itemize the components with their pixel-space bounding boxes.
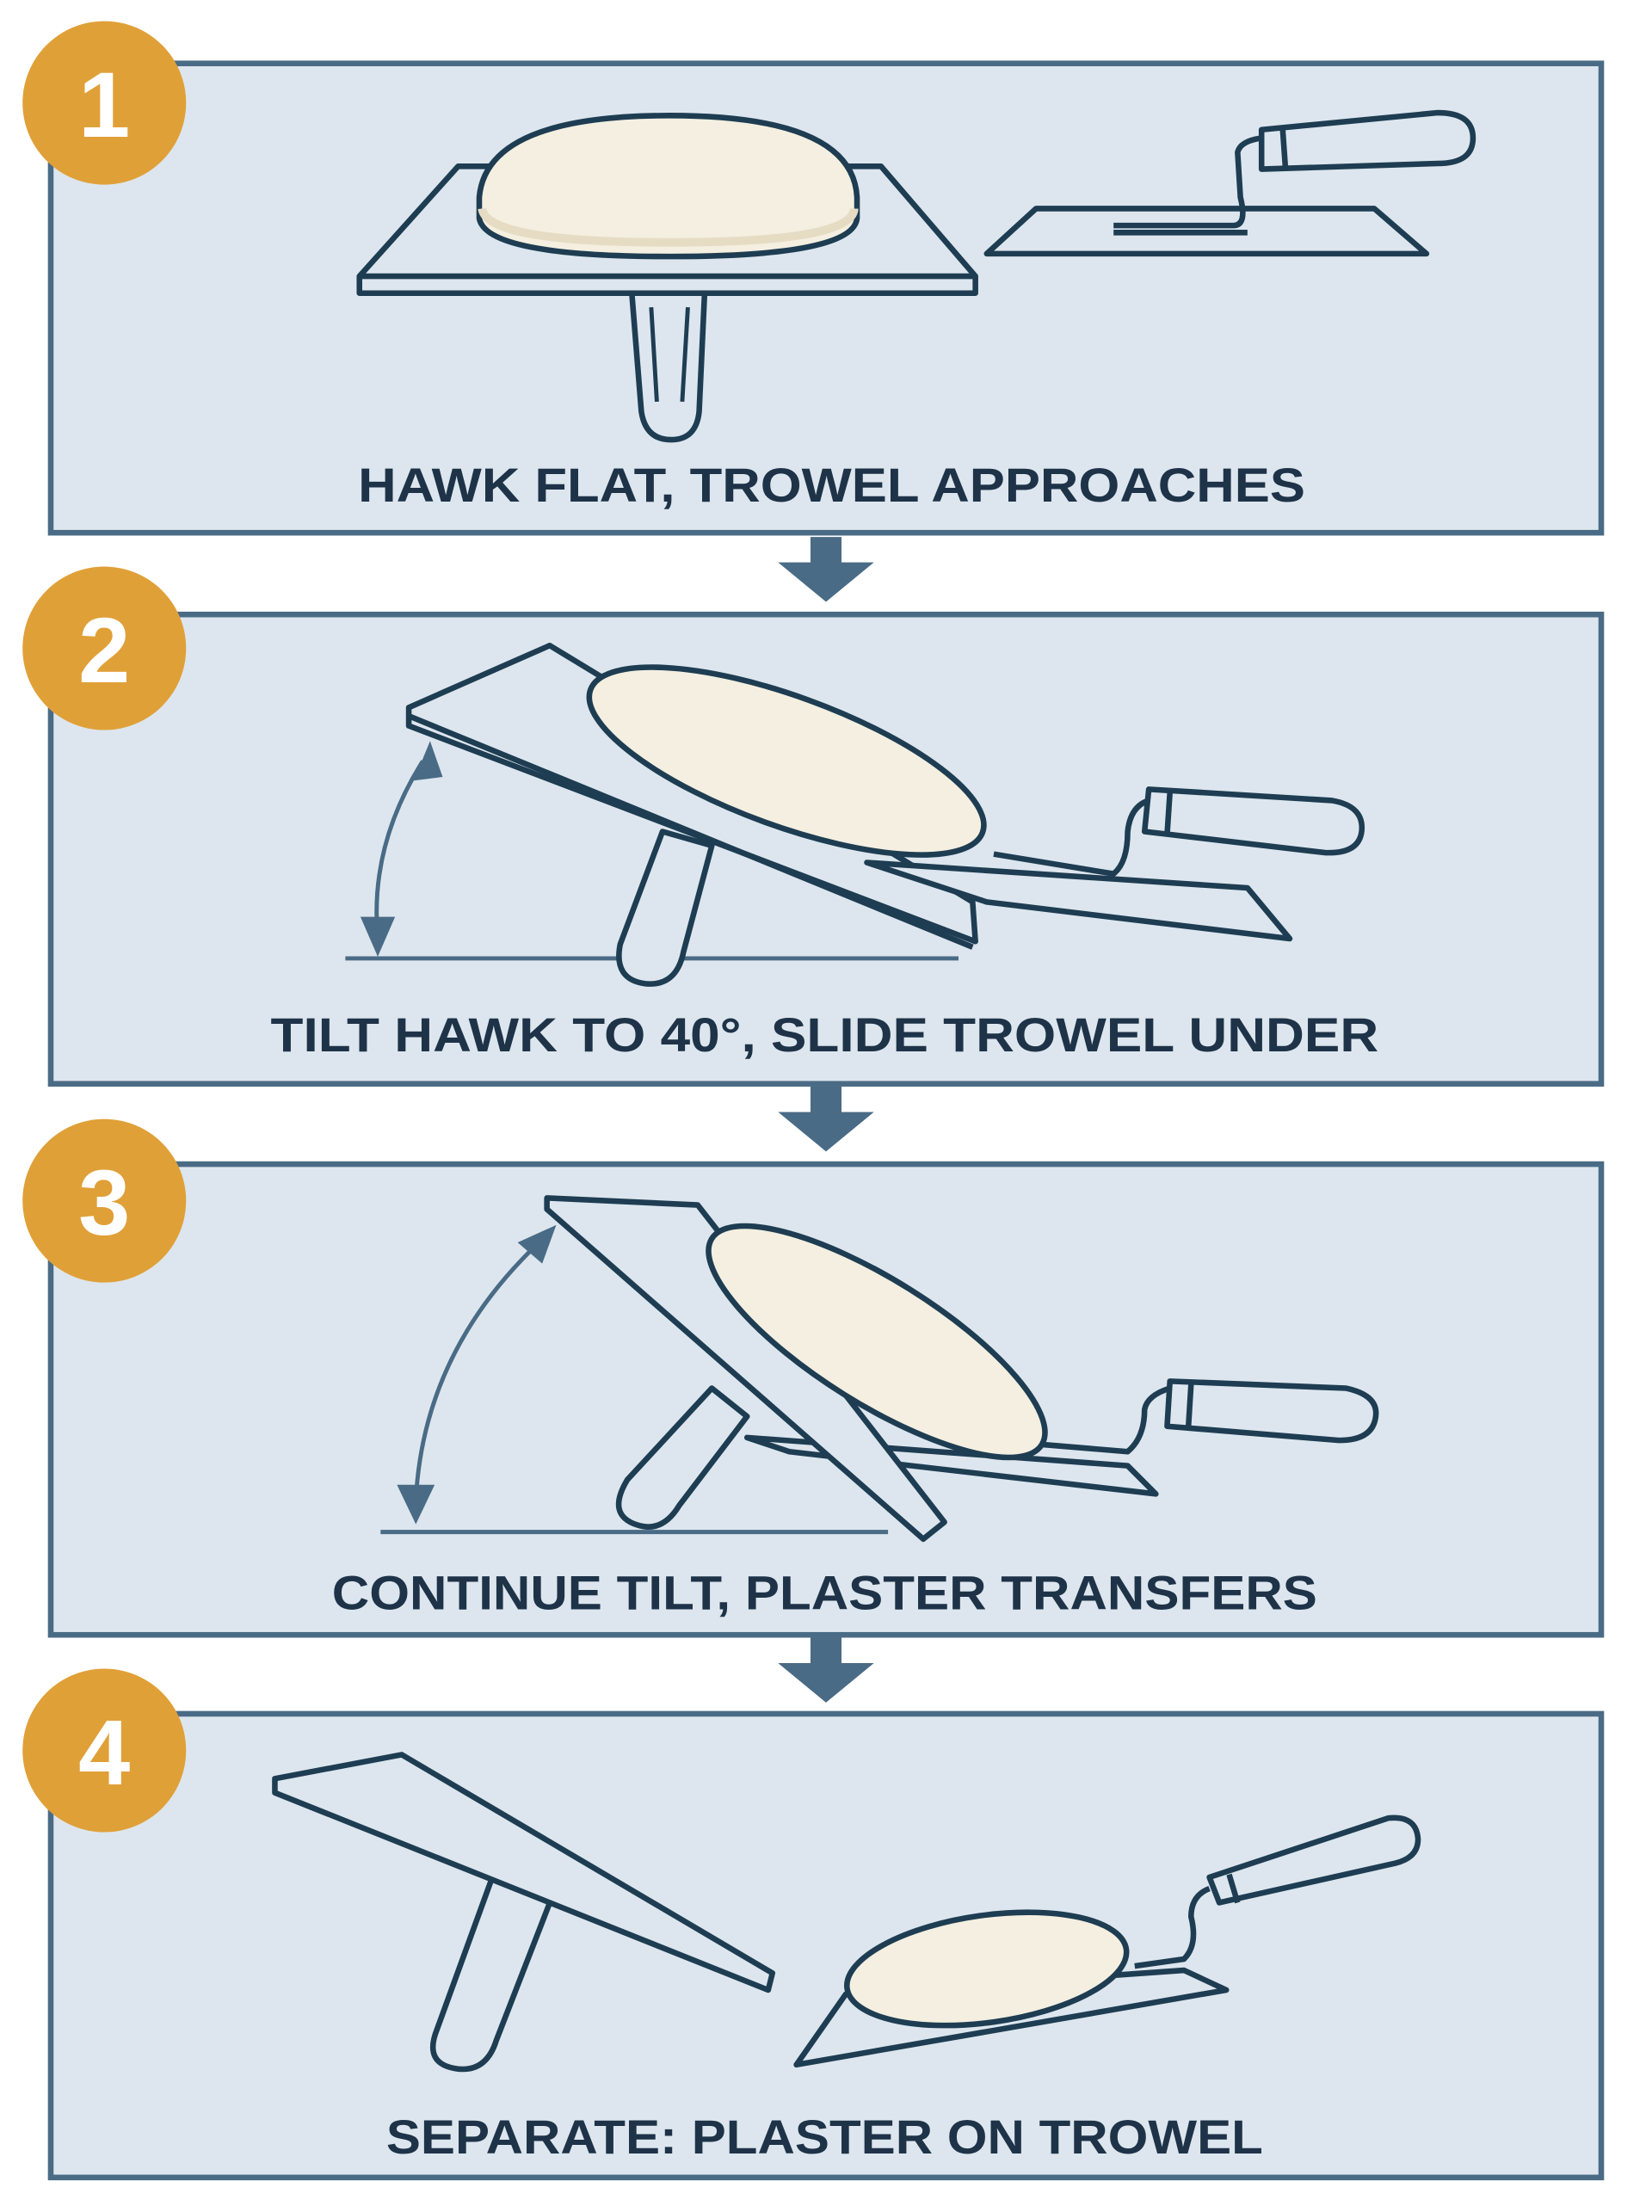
angle indicator (380, 1229, 888, 1532)
badge: 2: 2 (78, 598, 130, 702)
icon: trowel approaching (987, 113, 1473, 254)
arrow: 3 to 4 (778, 1637, 874, 1703)
heading: step 1 caption: HAWK FLAT, TROWEL APPROACHES (358, 459, 1305, 512)
icon: steep hawk with plaster (547, 1186, 1376, 1539)
panel: step 2 (51, 614, 1601, 1084)
badge: 4 (22, 1669, 186, 1833)
panel: step 4 (51, 1714, 1601, 2178)
badge: 3 (22, 1119, 186, 1283)
badge: 1 (22, 22, 186, 185)
icon: trowel with plaster (797, 1818, 1418, 2065)
badge: 1: 1 (78, 52, 130, 157)
panel: step 1 (51, 64, 1601, 533)
arrow: 2 to 3 (778, 1087, 874, 1151)
heading: step 4 caption: SEPARATE: PLASTER ON TROWEL (386, 2110, 1263, 2164)
icon: tilted hawk with plaster (409, 629, 1005, 984)
badge: 4: 4 (78, 1700, 130, 1804)
angle indicator (345, 747, 959, 958)
arrow: 1 to 2 (778, 537, 874, 601)
panel: step 3 (51, 1164, 1601, 1635)
badge: 3: 3 (78, 1150, 130, 1254)
icon: hawk separated (274, 1754, 773, 2069)
heading: step 3 caption: CONTINUE TILT, PLASTER TRANSFERS (332, 1567, 1317, 1620)
icon: trowel sliding under (867, 789, 1362, 939)
icon: hawk flat with plaster (360, 115, 976, 440)
heading: step 2 caption: TILT HAWK TO 40°, SLIDE TROWEL UNDER (271, 1008, 1378, 1062)
badge: 2 (22, 567, 186, 730)
